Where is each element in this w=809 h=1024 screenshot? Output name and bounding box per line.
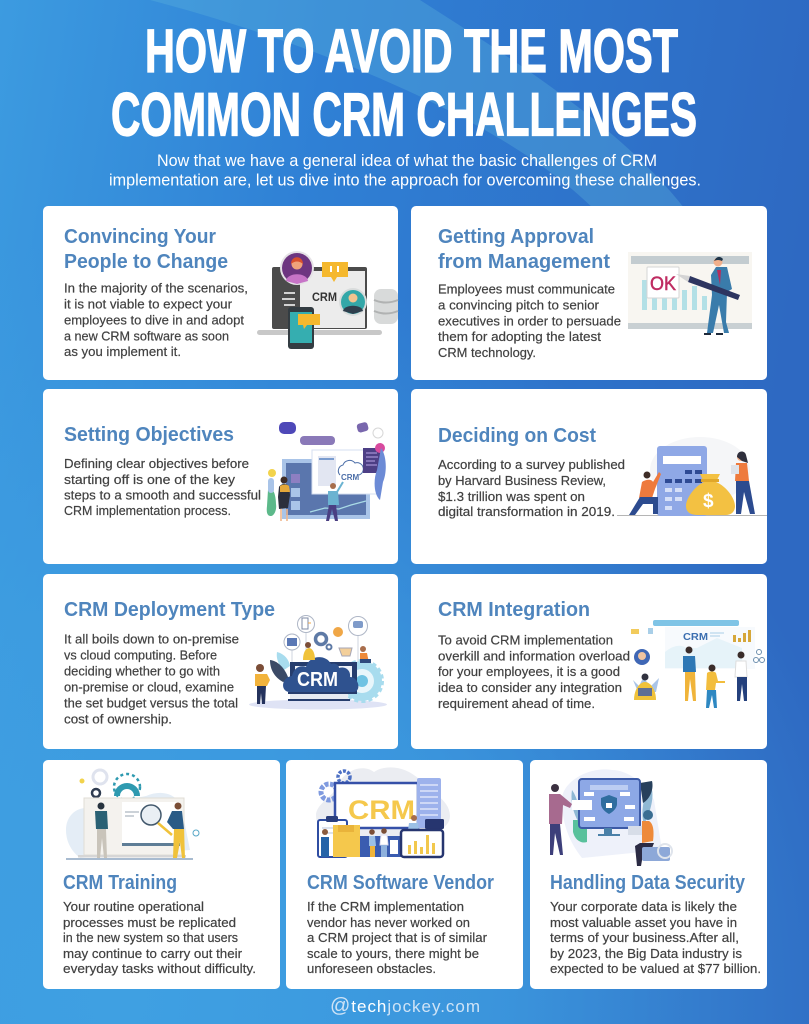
heading: Getting Approval: [438, 225, 594, 248]
text block: by 2023, the Big Data industry is: [550, 946, 743, 961]
icon: CRM laptop: CRM: [312, 290, 337, 304]
text block: vendor has never worked on: [307, 915, 470, 930]
panel: CRM training: [43, 760, 280, 989]
panel: setting objectives: [43, 389, 398, 564]
text block: requirement ahead of time.: [438, 696, 595, 711]
heading: Setting Objectives: [64, 423, 234, 446]
text block: a convincing pitch to senior: [438, 298, 600, 312]
text block: deciding whether to go with: [64, 664, 220, 678]
heading: CRM Deployment Type: [64, 598, 275, 621]
subtitle: Now that we have a general idea of what the basic challenges of CRM: [157, 151, 657, 170]
icon: team integrating CRM: [631, 620, 764, 708]
text block: CRM implementation process.: [64, 503, 231, 518]
panel: CRM deployment type: [43, 574, 398, 749]
text block: If the CRM implementation: [307, 899, 464, 914]
text block: terms of your business.After all,: [550, 930, 739, 945]
heading: People to Change: [64, 250, 228, 273]
panel: CRM integration: [411, 574, 767, 749]
heading: from Management: [438, 250, 610, 273]
icon: CRM cloud: CRM: [297, 669, 338, 691]
text block: [550, 899, 761, 976]
text block: in the new system so that users: [63, 930, 238, 945]
heading: Convincing Your: [64, 225, 216, 248]
text block: [307, 899, 488, 976]
heading: CRM Training: [63, 871, 177, 894]
heading: [438, 225, 610, 273]
text block: scale to yours, there might be: [307, 946, 479, 961]
text block: [438, 632, 630, 711]
text block: cost of ownership.: [64, 712, 172, 726]
icon: team integrating CRM: CRM: [683, 631, 708, 643]
text block: To avoid CRM implementation: [438, 632, 613, 648]
text block: steps to a smooth and successful: [64, 488, 261, 502]
text block: most valuable asset you have in: [550, 915, 737, 930]
footer logo: @techjockey.com: [330, 995, 480, 1017]
text block: processes must be replicated: [63, 915, 236, 930]
text block: In the majority of the scenarios,: [64, 280, 248, 296]
text block: Your corporate data is likely the: [550, 899, 737, 914]
icon: calculator and money bag: $: [703, 491, 714, 512]
text block: vs cloud computing. Before: [64, 648, 217, 662]
text block: the set budget versus the total: [64, 696, 238, 710]
text block: $1.3 trillion was spent on: [438, 489, 585, 504]
text block: it is not viable to expect your: [64, 296, 233, 312]
text block: [438, 282, 621, 360]
text block: [438, 457, 625, 519]
heading: Handling Data Security: [550, 871, 746, 894]
icon: CRM vendor: CRM: [348, 795, 415, 825]
text block: digital transformation in 2019.: [438, 504, 615, 519]
icon: objectives dashboard: CRM: [341, 473, 360, 482]
text block: CRM technology.: [438, 345, 536, 360]
text block: employees to dive in and adopt: [64, 312, 244, 328]
panel: getting approval from management: [411, 206, 767, 380]
subtitle: [109, 151, 701, 190]
text block: [64, 632, 239, 726]
text block: on-premise or cloud, examine: [64, 680, 234, 694]
title: [111, 17, 697, 148]
text block: as you implement it.: [64, 344, 181, 359]
text block: expected to be valued at $77 billion.: [550, 961, 761, 976]
panel: CRM software vendor: [286, 760, 523, 989]
text block: According to a survey published: [438, 457, 625, 472]
text block: [64, 280, 248, 359]
text block: a CRM project that is of similar: [307, 930, 488, 945]
icon: manager with OK pen: [628, 252, 752, 334]
text block: everyday tasks without difficulty.: [63, 961, 256, 976]
heading: CRM Integration: [438, 598, 590, 621]
icon: CRM cloud: [249, 616, 387, 710]
icon: calculator and money bag: [617, 437, 767, 516]
subtitle: implementation are, let us dive into the approach for overcoming these challenges.: [109, 170, 701, 190]
icon: data security: [549, 769, 672, 866]
text block: Your routine operational: [63, 899, 204, 914]
heading: Deciding on Cost: [438, 424, 596, 447]
panel: handling data security: [530, 760, 767, 989]
text block: a new CRM software as soon: [64, 328, 229, 344]
icon: CRM laptop: [257, 251, 398, 349]
text block: It all boils down to on-premise: [64, 632, 239, 646]
panel: convincing your people to change: [43, 206, 398, 380]
text block: overkill and information overload: [438, 648, 630, 664]
icon: CRM vendor: [316, 767, 450, 857]
icon: objectives dashboard: [267, 422, 386, 521]
text block: for your employees, it is a good: [438, 664, 620, 679]
text block: Employees must communicate: [438, 282, 615, 296]
icon: CRM training: [66, 770, 199, 859]
text block: unforeseen obstacles.: [307, 961, 436, 976]
text block: [64, 456, 261, 518]
text block: [63, 899, 256, 976]
heading: CRM Software Vendor: [307, 871, 494, 894]
text block: starting off is one of the key: [64, 472, 236, 487]
icon: manager with OK pen: OK: [650, 274, 676, 295]
text block: may continue to carry out their: [63, 946, 243, 961]
text block: executives in order to persuade: [438, 314, 621, 328]
text block: idea to consider any integration: [438, 680, 622, 695]
text block: by Harvard Business Review,: [438, 473, 606, 488]
panel: deciding on cost: [411, 389, 767, 564]
heading: [64, 225, 228, 273]
text block: them for adopting the latest: [438, 329, 601, 344]
text block: Defining clear objectives before: [64, 456, 249, 471]
